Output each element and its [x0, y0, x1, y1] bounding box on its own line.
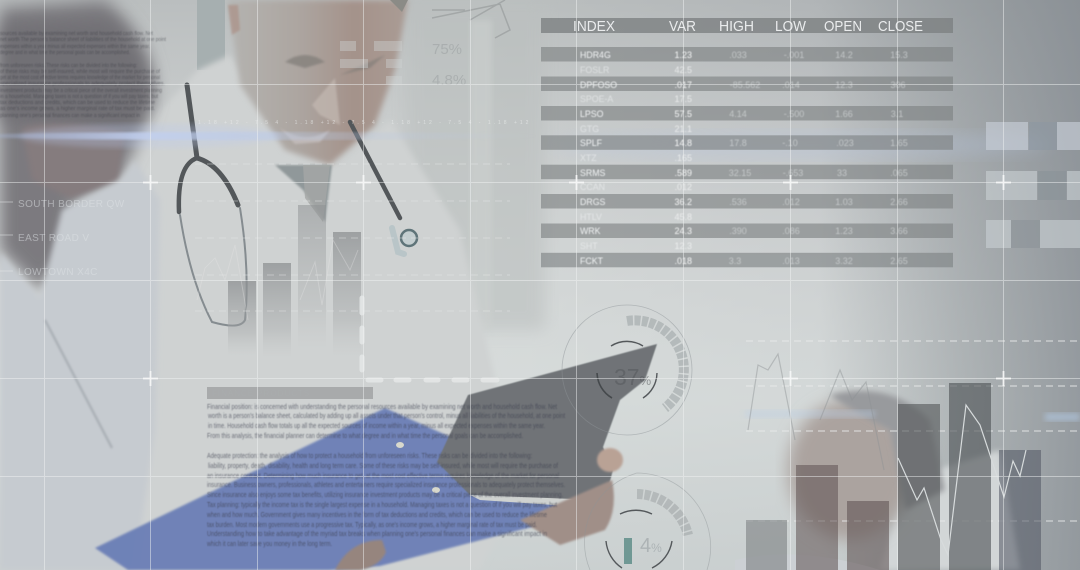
faded paragraph text: top left: net worth The person's balance sheet of liabilities of the household at one point	[0, 37, 166, 43]
crosshair markers	[143, 175, 1011, 386]
faded figures and drip stand top: 4.8%	[432, 72, 466, 89]
finance report: heading bar	[207, 387, 373, 399]
table var column: .589	[674, 168, 692, 178]
faded paragraph text: top left: sources available by examining net worth and household cash flow. Net	[0, 31, 153, 37]
table index names: SPOE-A	[580, 94, 613, 104]
blue lens flare	[0, 124, 1080, 421]
finance report: paragraphs	[206, 402, 565, 548]
location labels	[0, 199, 125, 278]
table index names: XTZ	[580, 153, 597, 163]
finance report: paragraphs: Since insurance also enjoys some tax benefits, utilizing insurance investment products may be a critical piece of the overall investment planning.	[207, 490, 563, 499]
table high low open close columns: .013	[782, 256, 800, 266]
table index names: SHT	[580, 241, 598, 251]
table var column: .012	[674, 182, 692, 192]
faded paragraph text: top left: as one's income grows, a higher marginal rate of tax must be paid.	[0, 106, 155, 112]
photo: grey tablet held in hand	[437, 344, 657, 545]
table high low open close columns: 3.1	[891, 109, 903, 119]
table header bar: CLOSE	[878, 19, 923, 35]
faded paragraph text: top left: from unforeseen risks. These risks can be divided into the following:	[0, 63, 137, 69]
table high low open close columns: 306	[890, 80, 906, 90]
table index names: CCAN	[580, 182, 605, 192]
table var column: .165	[674, 153, 692, 163]
table index names: SPLF	[580, 138, 603, 148]
table index names: GTG	[580, 124, 599, 134]
table var column: 45.8	[674, 212, 692, 222]
finance report: paragraphs: From this analysis, the financial planner can determine to what degree and in what time the personal goals can be accomplished.	[207, 431, 523, 440]
faded figures and drip stand top	[432, 0, 510, 89]
table high low open close columns: .023	[836, 138, 854, 148]
table header bar: INDEX	[573, 19, 615, 35]
table high low open close columns: 15.3	[890, 50, 908, 60]
table index names: FCKT	[580, 256, 604, 266]
table high low open close columns: -85.562	[730, 80, 760, 90]
table high low open close columns: 32.15	[729, 168, 751, 178]
faded paragraph text: top left: tax deductions and credits, which can be used to reduce the lifetime	[0, 100, 155, 106]
table high low open close columns: 2.65	[890, 256, 908, 266]
table var column: .017	[674, 80, 692, 90]
table var column: 12.3	[674, 241, 692, 251]
finance report: paragraphs: in time. Household cash flow totals up all the expected sources of income within a year, minus all expected expenses within the same year.	[208, 421, 545, 430]
table high low open close columns	[729, 50, 908, 266]
table high low open close columns: .014	[782, 80, 800, 90]
table high low open close columns: 3.32	[835, 256, 853, 266]
upper small blocks	[340, 41, 402, 84]
finance report: paragraphs: Tax planning: typically the income tax is the single largest expense in a household. Managing taxes is not a question of if you will pay taxes, but	[207, 500, 557, 509]
faded paragraph text: top left: in a household. Managing taxes is not a question of if you will pay taxes, but	[0, 94, 158, 100]
table high low open close columns: .390	[729, 226, 747, 236]
faded paragraph text: top left	[0, 31, 166, 119]
table index names: SRMS	[580, 168, 606, 178]
table high low open close columns: .065	[890, 168, 908, 178]
faded paragraph text: top left: investment products may be a critical piece of the overall investment planning	[0, 88, 162, 94]
faded paragraph text: top left: planning one's personal finances can make a significant impact in	[0, 113, 140, 119]
finance report: paragraphs: Financial position: is concerned with understanding the personal resources available by examining net worth and household cash flow. Net	[207, 402, 557, 411]
finance report: paragraphs: tax burden. Most modern governments use a progressive tax. Typically, as one's income grows, a higher marginal rate of tax must be paid.	[207, 520, 537, 529]
photo: female doctor	[0, 0, 160, 570]
table var column: 17.5	[674, 94, 692, 104]
faded paragraph text: top left: specialized insurance professionals to adequately protect themselves.	[0, 81, 165, 87]
table high low open close columns: -.653	[783, 168, 803, 178]
gauge: 37 percent: 37%	[614, 364, 652, 390]
table var column: 57.5	[674, 109, 692, 119]
table high low open close columns: 1.03	[835, 197, 853, 207]
bar chart: lower right	[746, 341, 1080, 570]
table high low open close columns: 2.66	[890, 197, 908, 207]
table index names	[580, 50, 617, 266]
thick dashed line	[362, 298, 497, 380]
icon: stethoscope	[179, 85, 417, 326]
table index names: HDR4G	[580, 50, 611, 60]
table header bar: HIGH	[719, 19, 754, 35]
table var column	[674, 50, 692, 266]
table row stripes	[541, 47, 953, 267]
table high low open close columns: 14.2	[835, 50, 853, 60]
table var column: 24.3	[674, 226, 692, 236]
table index names: FOSLR	[580, 65, 609, 75]
table high low open close columns: 17.8	[729, 138, 747, 148]
table high low open close columns: 1.23	[835, 226, 853, 236]
table header bar: VAR	[669, 19, 696, 35]
table high low open close columns: -.001	[784, 50, 804, 60]
dashed guide lines: upper left	[195, 164, 510, 311]
gauge: 37 percent	[562, 305, 692, 435]
table index names: DPFOSO	[580, 80, 617, 90]
finance report: paragraphs: which it can later save you money in the long term.	[206, 539, 332, 548]
faded figures and drip stand top: 75%	[432, 41, 462, 58]
table var column: 36.2	[674, 197, 692, 207]
table high low open close columns: 3.3	[729, 256, 741, 266]
table high low open close columns: .536	[729, 197, 747, 207]
finance report: heading bar: FINANCE PRODUCTS	[212, 389, 310, 398]
table high low open close columns: .033	[729, 50, 747, 60]
gauge: 4 percent: 4%	[640, 535, 662, 557]
finance report: paragraphs: Understanding how to take advantage of the myriad tax breaks when planning one's personal finances can make a significant impact in	[207, 529, 547, 538]
location labels: EAST ROAD V	[18, 233, 89, 244]
table header bar: LOW	[775, 19, 806, 35]
right side block grid	[986, 122, 1080, 248]
finance report: paragraphs: worth is a person's balance sheet, calculated by adding up all assets under that person's control, minus all liabilities of the household, at one point	[207, 411, 565, 420]
table high low open close columns: 3.66	[890, 226, 908, 236]
table index names: LPSO	[580, 109, 604, 119]
table header bar: OPEN	[824, 19, 862, 35]
table high low open close columns: 1.65	[890, 138, 908, 148]
table high low open close columns: 1.66	[835, 109, 853, 119]
finance report: paragraphs: an insurance contract. Determining how much insurance to get, at the most cost effective terms requires knowledge of the market for personal	[207, 471, 559, 480]
table var column: 42.5	[674, 65, 692, 75]
table high low open close columns: .012	[782, 197, 800, 207]
table index names: DRGS	[580, 197, 606, 207]
table var column: 14.8	[674, 138, 692, 148]
faded paragraph text: top left: get at the most cost effective terms requires knowledge of the market for personal	[0, 75, 160, 81]
photo: doctor in white coat	[90, 0, 530, 570]
faded paragraph text: top left: of these risks may be self-insured, while most will require the purchase of	[0, 69, 160, 75]
data table	[541, 18, 953, 267]
gauge: 4 percent	[584, 473, 711, 570]
table high low open close columns: 12.3	[835, 80, 853, 90]
location labels: LOWTOWN X4C	[18, 267, 98, 278]
photo: blue clipboard	[95, 408, 600, 570]
table high low open close columns: .086	[782, 226, 800, 236]
table high low open close columns: 4.14	[729, 109, 747, 119]
bar chart: upper left	[197, 205, 361, 358]
table high low open close columns: 33	[837, 168, 847, 178]
table high low open close columns: -.10	[782, 138, 798, 148]
table high low open close columns: -.500	[784, 109, 804, 119]
table index names: HTLV	[580, 212, 602, 222]
table index names: WRK	[580, 226, 601, 236]
finance report: paragraphs: when and how much. Government gives many incentives in the form of tax deductions and credits, which can be used to reduce the lifetime	[206, 510, 547, 519]
photo: patient in bed	[735, 391, 1020, 570]
table var column: 21.1	[674, 124, 692, 134]
table header bar	[541, 18, 953, 35]
location labels: SOUTH BORDER QW	[18, 199, 125, 210]
finance report: paragraphs: liability, property, death, disability, health and long term care. Some of these risks may be self-insured, while most will require the purchase of	[208, 461, 559, 470]
table var column: 1.23	[674, 50, 692, 60]
finance report: paragraphs: Adequate protection: the analysis of how to protect a household from unforeseen risks. These risks can be divided into the following:	[207, 451, 532, 460]
finance report: paragraphs: insurance. Business owners, professionals, athletes and entertainers require specialized insurance professionals to adequately protect themselves.	[207, 480, 565, 489]
faded paragraph text: top left: expenses within a year minus all expected expenses within the same year.	[0, 44, 150, 50]
faded paragraph text: top left: degree and in what time the personal goals can be accomplished.	[0, 50, 130, 56]
tick data strip: 1.18 +12 - 7.5 4 - 1.18 +12 - 7.5 4 - 1.18 +12 - 7.5 4 - 1.18 +12	[198, 120, 531, 126]
table var column: .018	[674, 256, 692, 266]
